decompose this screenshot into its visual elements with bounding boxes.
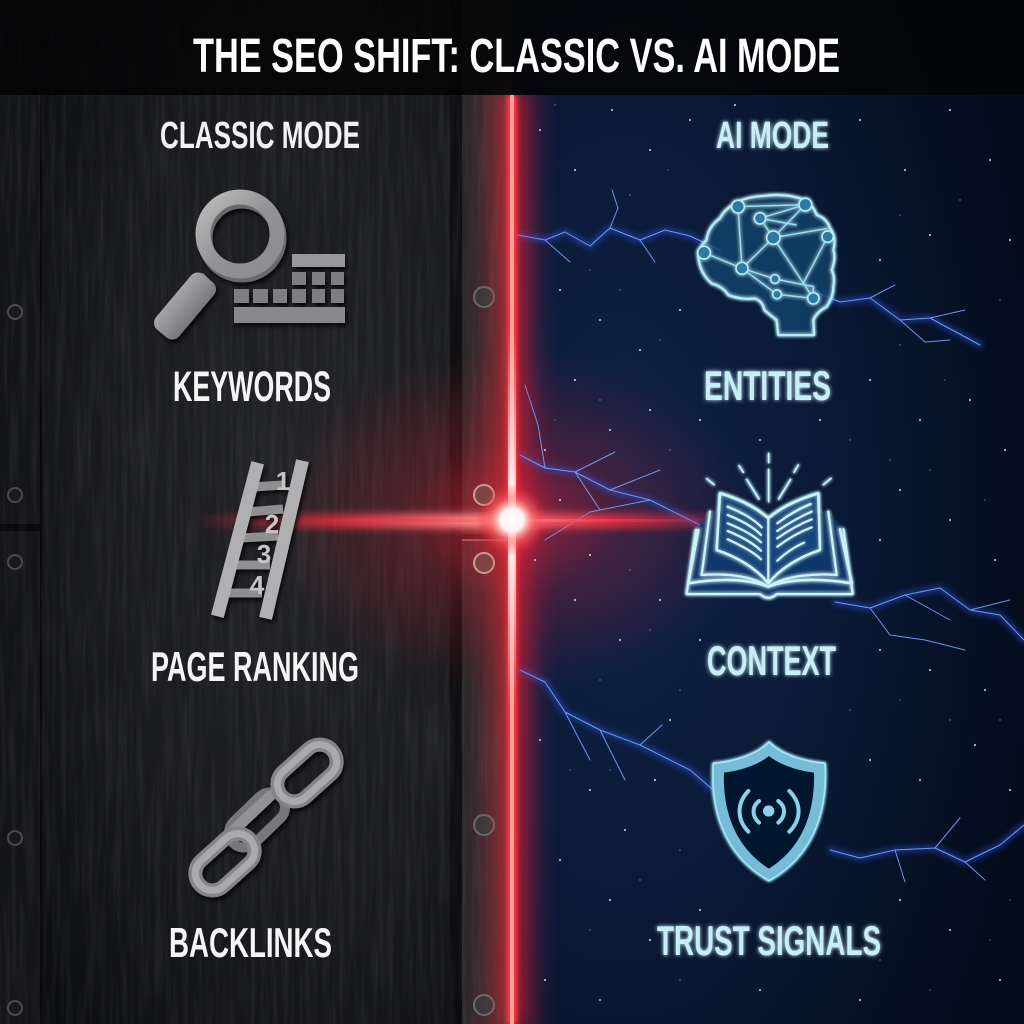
icon: shield with signal bbox=[713, 742, 825, 881]
red laser divider bbox=[190, 95, 760, 1024]
lightning arcs bbox=[518, 190, 1024, 882]
label: context: CONTEXT bbox=[707, 637, 836, 684]
red ambient glow bbox=[272, 95, 752, 1024]
lightning glow bbox=[518, 228, 1024, 862]
column heading: classic mode: CLASSIC MODE bbox=[160, 115, 360, 157]
title bar bbox=[0, 0, 1024, 95]
ladder numbers bbox=[250, 466, 290, 600]
icon: brain network bbox=[698, 195, 834, 335]
ladder numbers: 2 bbox=[265, 509, 279, 539]
ladder numbers: 1 bbox=[276, 466, 290, 496]
icon: ladder with rank numbers bbox=[219, 466, 301, 612]
icon: chain links bbox=[188, 738, 344, 897]
flare core bbox=[476, 484, 548, 556]
icon: magnifier and keyboard bbox=[150, 197, 345, 343]
rivets bbox=[8, 287, 494, 1015]
ladder numbers: 3 bbox=[257, 539, 271, 569]
horizontal flare bbox=[190, 514, 760, 528]
label: keywords: KEYWORDS bbox=[173, 363, 331, 411]
column heading: AI mode: AI MODE bbox=[716, 115, 829, 157]
label: trust signals: TRUST SIGNALS bbox=[657, 917, 881, 964]
panel: AI circuit side bbox=[512, 0, 1024, 1024]
stars bbox=[535, 105, 1010, 1000]
vertical beam bbox=[498, 95, 526, 1024]
icon: open book bbox=[687, 453, 853, 598]
panel: classic metal side bbox=[0, 0, 512, 1024]
label: entities: ENTITIES bbox=[704, 362, 831, 409]
label: backlinks: BACKLINKS bbox=[169, 919, 332, 966]
ladder numbers: 4 bbox=[250, 570, 265, 600]
label: page ranking: PAGE RANKING bbox=[151, 643, 359, 690]
lightning strands bbox=[518, 190, 1024, 882]
